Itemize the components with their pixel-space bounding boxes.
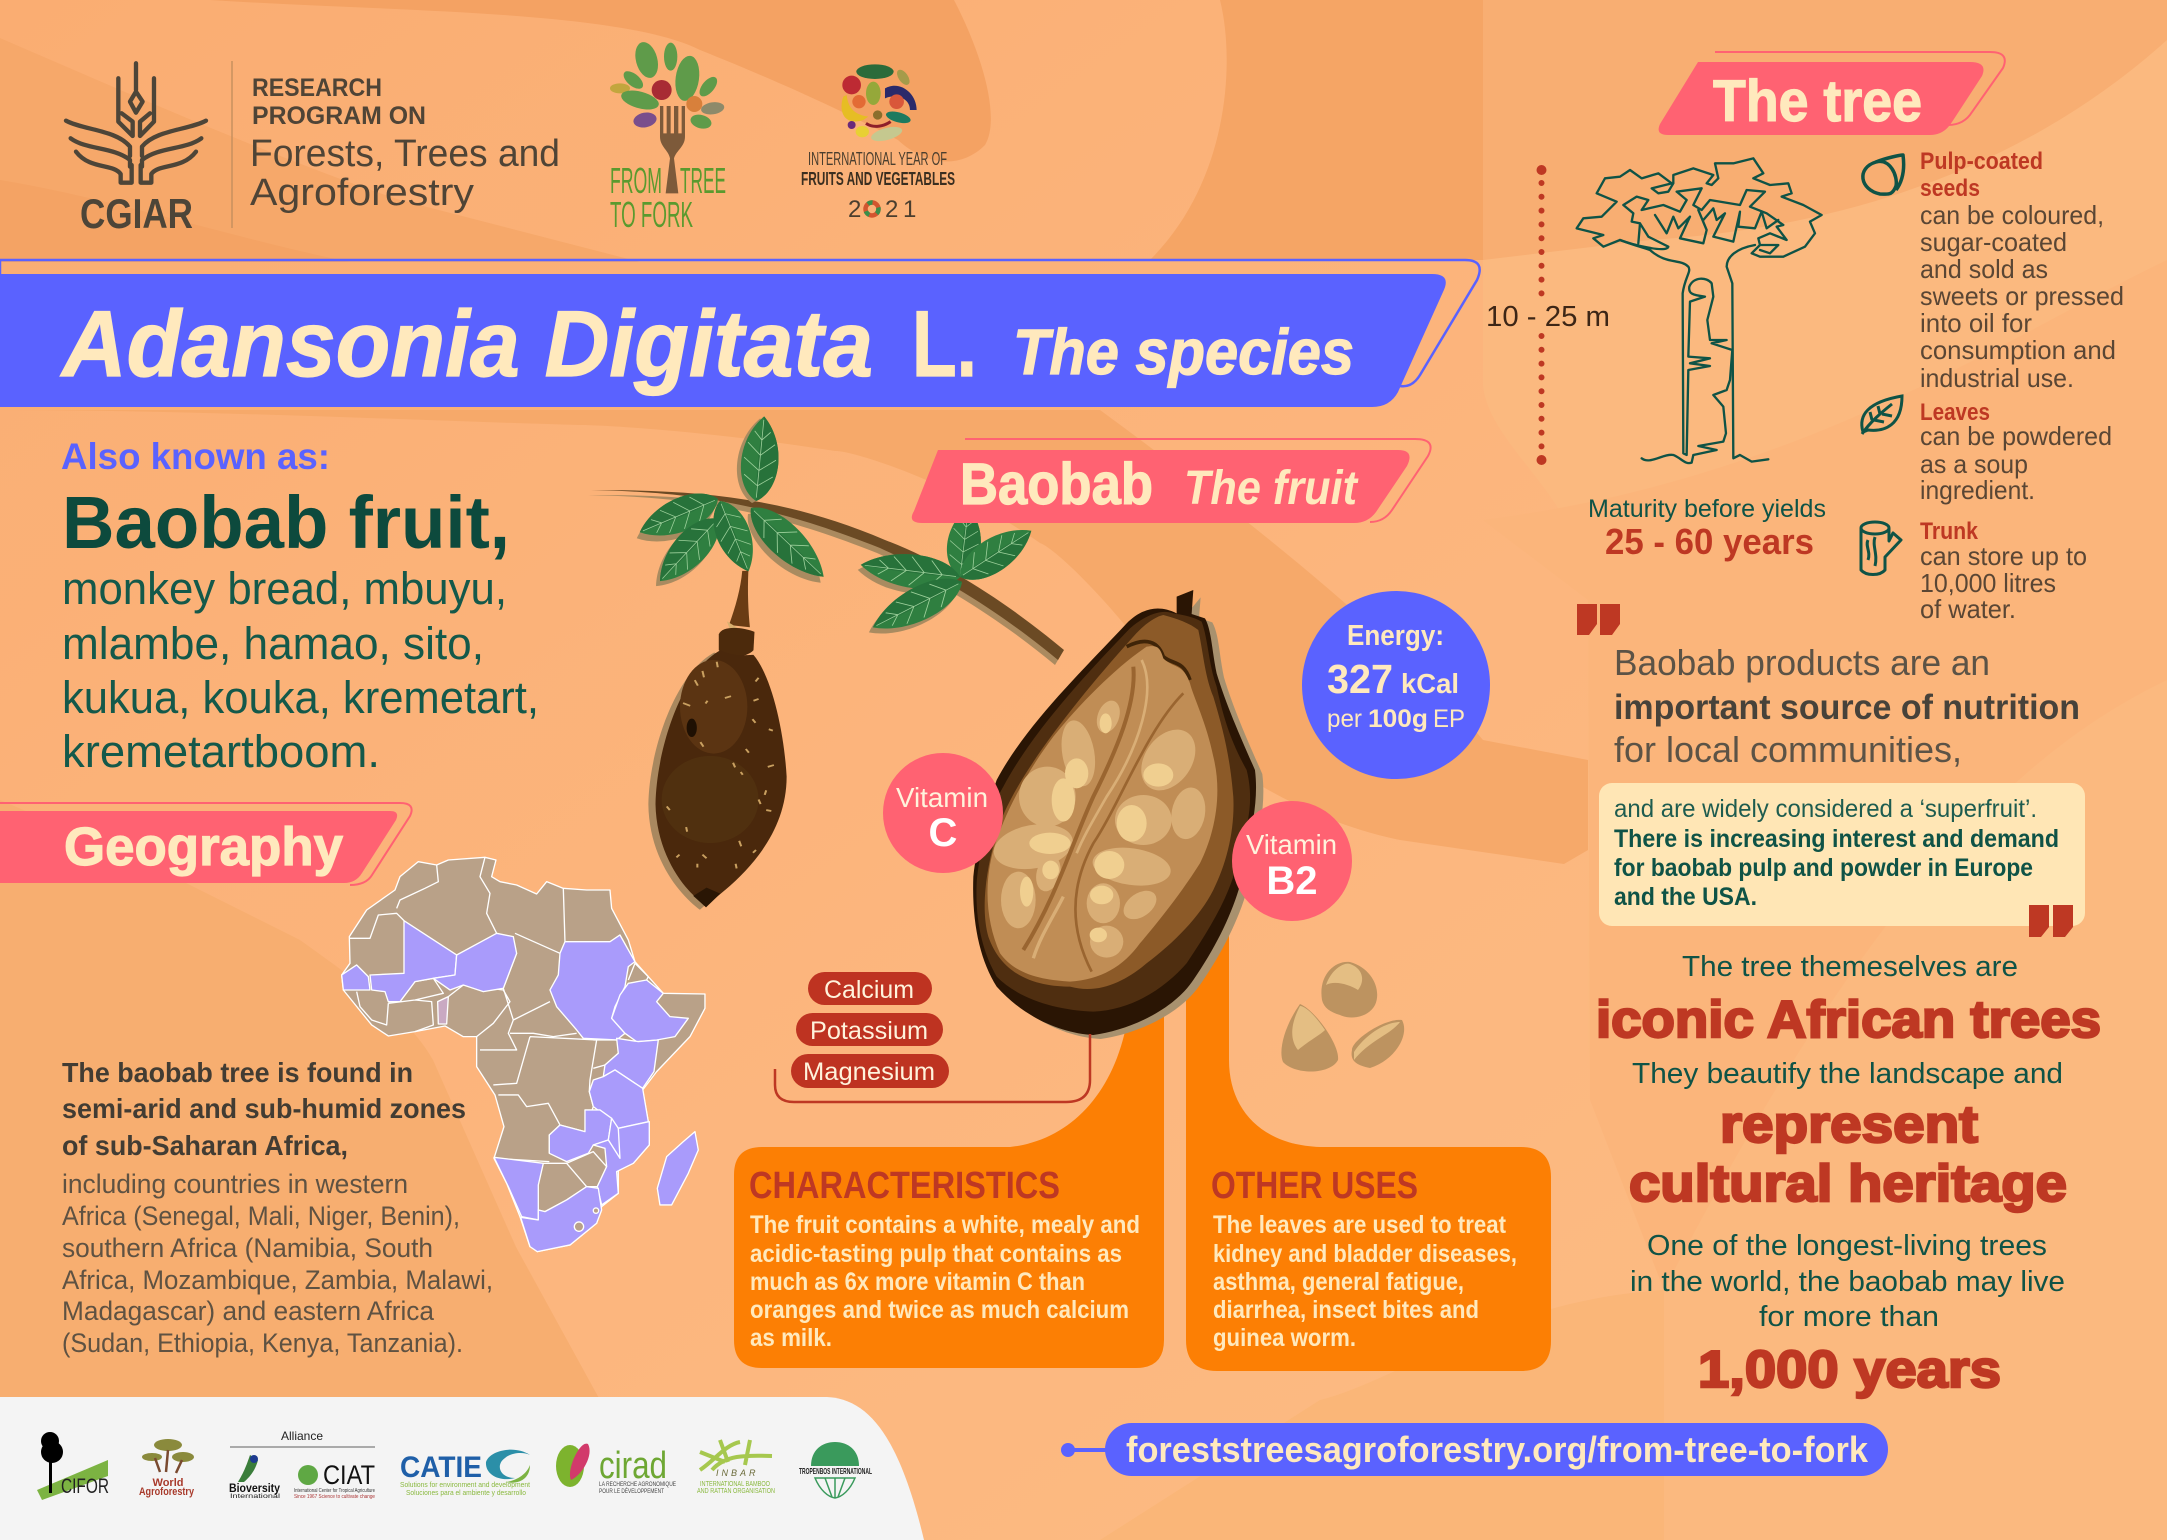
- text: other names: kukua, kouka, kremetart,: [62, 672, 539, 723]
- circle: vitamin B2: Vitamin: [1246, 829, 1337, 860]
- logo: Alliance Bioversity CIAT: International: [230, 1494, 280, 1500]
- tree uses list: [1861, 148, 2124, 624]
- callout: superfruit: [1599, 783, 2085, 926]
- logo: CATIE: Soluciones para el ambiente y desarrollo: [406, 1488, 526, 1497]
- text: bold intro: The baobab tree is found in: [62, 1057, 413, 1088]
- logo: CATIE: [400, 1450, 531, 1497]
- logo: Tropenbos International: [799, 1442, 872, 1498]
- logo: Tropenbos International: TROPENBOS INTERNATIONAL: [799, 1466, 872, 1476]
- text: countries list: Africa (Senegal, Mali, Niger, Benin),: [62, 1201, 460, 1231]
- logo: From Tree to Fork: [610, 40, 726, 235]
- text: iconic trees statement: cultural heritage: [1629, 1155, 2067, 1213]
- pill: magnesium: [791, 1054, 949, 1088]
- callout: superfruit: There is increasing interest and demand: [1614, 825, 2059, 853]
- heading: Baobab fruit: Baobab fruit,: [62, 481, 510, 564]
- text: trunk: 10,000 litres: [1920, 568, 2056, 598]
- orange box: characteristics: [734, 930, 1164, 1368]
- logo: World Agroforestry: World: [153, 1477, 183, 1489]
- icon: seeds: [1863, 155, 1904, 194]
- circle: vitamin C: Vitamin: [896, 782, 988, 813]
- logo: Alliance Bioversity CIAT: International Center for Tropical Agriculture: [294, 1488, 375, 1494]
- icon: fork tree: [610, 40, 725, 193]
- logo: From Tree to Fork: FROM: [610, 160, 662, 201]
- circle: energy: EP: [1433, 705, 1465, 733]
- text: maturity: Maturity before yields: [1588, 495, 1826, 523]
- text: pulp-coated seeds: sweets or pressed: [1920, 281, 2124, 311]
- logo: CIFOR: [37, 1432, 109, 1500]
- text: iconic trees statement: represent: [1720, 1096, 1978, 1154]
- callout: superfruit: for baobab pulp and powder in Europe: [1614, 854, 2033, 882]
- logo: CATIE: CATIE: [400, 1451, 482, 1484]
- text: trunk: of water.: [1920, 594, 2016, 624]
- logo: Alliance Bioversity CIAT: Alliance: [281, 1429, 323, 1443]
- text: iconic trees statement: The tree themeselves are: [1682, 951, 2018, 983]
- text: iconic trees statement: in the world, the baobab may live: [1630, 1266, 2065, 1298]
- logo: cirad: [556, 1444, 676, 1495]
- logo: cirad: POUR LE DÉVELOPPEMENT: [599, 1486, 664, 1495]
- text: countries list: Madagascar) and eastern Africa: [62, 1296, 435, 1326]
- text: quote lead: important source of nutrition: [1614, 688, 2080, 727]
- circle: energy: 327: [1327, 656, 1393, 702]
- height scale: 10 - 25 m: 10 - 25 m: [1486, 301, 1610, 333]
- title banner: [0, 260, 1480, 407]
- logo: cirad: LA RECHERCHE AGRONOMIQUE: [599, 1481, 676, 1488]
- text: program on: PROGRAM ON: [252, 102, 426, 130]
- pill: potassium: [796, 1013, 943, 1046]
- logo: Alliance Bioversity CIAT: CIAT: [323, 1460, 375, 1490]
- logo: World Agroforestry: Agroforestry: [139, 1486, 195, 1498]
- circle: vitamin C: C: [929, 811, 957, 855]
- text: bold intro: semi-arid and sub-humid zones: [62, 1093, 466, 1124]
- text: pulp-coated seeds: into oil for: [1920, 308, 2032, 338]
- text: pulp-coated seeds: sugar-coated: [1920, 227, 2067, 257]
- text: iconic trees statement: One of the longest-living trees: [1647, 1230, 2047, 1262]
- leaves: first cluster: [630, 415, 835, 598]
- text: other uses body: kidney and bladder diseases,: [1213, 1240, 1517, 1268]
- text: TREE: [680, 160, 726, 201]
- logo: INBAR: AND RATTAN ORGANISATION: [697, 1488, 775, 1495]
- text: pulp-coated seeds: and sold as: [1920, 254, 2048, 284]
- text: other uses body: diarrhea, insect bites and: [1213, 1296, 1479, 1324]
- text: 2021: 2: [848, 196, 861, 223]
- logo: Alliance Bioversity CIAT: [229, 1429, 375, 1500]
- icon: baobab tree outline: [1577, 158, 1822, 463]
- text: countries list: (Sudan, Ethiopia, Kenya, Tanzania).: [62, 1328, 463, 1358]
- text: other uses body: [1213, 1211, 1517, 1352]
- text: Agroforestry: Agroforestry: [250, 172, 474, 214]
- text: leaves: Leaves: [1920, 399, 1990, 426]
- logo: INBAR: [697, 1440, 775, 1495]
- heading: The tree: [1659, 52, 2005, 135]
- heading: The tree: The tree: [1713, 69, 1922, 134]
- text: characteristics body: much as 6x more vitamin C than: [750, 1268, 1085, 1296]
- text: quote lead: Baobab products are an: [1614, 642, 1990, 683]
- pill: calcium: Calcium: [824, 976, 914, 1004]
- heading: Baobab the fruit: The fruit: [1184, 462, 1359, 515]
- icon: trunk: [1861, 522, 1901, 574]
- text: other uses body: The leaves are used to treat: [1213, 1211, 1507, 1239]
- text: trunk: [1920, 518, 2087, 624]
- icon: fruit face: [842, 64, 917, 144]
- text: pulp-coated seeds: industrial use.: [1920, 363, 2074, 393]
- text: leaves: [1920, 399, 2112, 505]
- circle: energy: Energy:: [1347, 620, 1444, 652]
- text: characteristics body: acidic-tasting pulp that contains as: [750, 1240, 1122, 1268]
- title: L.: L.: [912, 291, 977, 396]
- subtitle: The species: The species: [1013, 316, 1354, 388]
- heading: Baobab the fruit: Baobab: [960, 452, 1153, 517]
- map of Africa: [342, 857, 705, 1252]
- text: characteristics body: [750, 1211, 1140, 1352]
- text: bold intro: of sub-Saharan Africa,: [62, 1130, 348, 1161]
- text: CGIAR: CGIAR: [80, 190, 193, 237]
- icon: opening quote mark: [1577, 604, 1620, 635]
- illustration: whole baobab fruit: [648, 571, 787, 910]
- text: countries list: [62, 1169, 493, 1358]
- text: trunk: Trunk: [1920, 518, 1979, 545]
- pill: calcium: [808, 972, 932, 1005]
- text: fruits and vegetables: FRUITS AND VEGETABLES: [801, 169, 955, 189]
- logo: INBAR: INBAR: [716, 1468, 759, 1478]
- text: other names: [62, 563, 539, 777]
- text: to fork: TO FORK: [610, 194, 693, 235]
- text: characteristics body: The fruit contains a white, mealy and: [750, 1211, 1140, 1239]
- text: countries list: southern Africa (Namibia, South: [62, 1233, 433, 1263]
- pill: magnesium: Magnesium: [803, 1058, 935, 1086]
- circle: energy: kCal: [1401, 668, 1459, 699]
- text: quote lead: [1614, 642, 2080, 770]
- logo: Alliance Bioversity CIAT: Bioversity: [229, 1481, 280, 1495]
- title: Adansonia Digitata: Adansonia Digitata: [60, 291, 873, 396]
- heading: Baobab the fruit: [912, 439, 1431, 523]
- circle: vitamin B2: B2: [1266, 859, 1318, 903]
- heading: also known as: Also known as:: [61, 436, 330, 477]
- icon: CGIAR wheat mark: [66, 63, 206, 183]
- text: pulp-coated seeds: [1920, 148, 2124, 393]
- logo: World Agroforestry: [139, 1439, 195, 1498]
- quote: [1577, 604, 2085, 937]
- text: other uses body: guinea worm.: [1213, 1324, 1356, 1352]
- text: other uses body: asthma, general fatigue,: [1213, 1268, 1464, 1296]
- circle: energy: per: [1327, 705, 1362, 733]
- footer partner logos: [0, 1397, 924, 1540]
- logo: cirad: cirad: [599, 1445, 667, 1487]
- countries highlighted: baobab range: [342, 921, 698, 1252]
- circle: energy: 100g: [1368, 705, 1428, 733]
- text: other names: monkey bread, mbuyu,: [62, 563, 507, 614]
- illustration: baobab seeds: [1281, 962, 1404, 1072]
- text: pulp-coated seeds: can be coloured,: [1920, 200, 2104, 230]
- text: bold intro: [62, 1057, 466, 1161]
- text: iconic trees statement: They beautify the landscape and: [1632, 1058, 2063, 1090]
- text: leaves: can be powdered: [1920, 421, 2112, 451]
- logo: CATIE: Solutions for environment and development: [400, 1480, 531, 1489]
- website link pill: foreststreesagroforestry.org/from-tree-to-fork: [1126, 1429, 1869, 1470]
- text: maturity: 25 - 60 years: [1605, 521, 1814, 562]
- circle: energy: [1302, 591, 1490, 779]
- text: research program: RESEARCH: [252, 74, 382, 102]
- text: iconic trees statement: for more than: [1759, 1301, 1939, 1333]
- pill: potassium: Potassium: [810, 1017, 928, 1045]
- text: pulp-coated seeds: consumption and: [1920, 335, 2116, 365]
- text: international year of: INTERNATIONAL YEAR OF: [808, 149, 947, 169]
- text: other names: kremetartboom.: [62, 726, 380, 777]
- text: countries list: Africa, Mozambique, Zambia, Malawi,: [62, 1265, 493, 1295]
- logo: INBAR: INTERNATIONAL BAMBOO: [700, 1481, 770, 1488]
- minerals list: [775, 972, 1090, 1102]
- illustration: cut baobab fruit: [973, 590, 1263, 1039]
- heading: other uses: OTHER USES: [1211, 1165, 1418, 1207]
- circle: vitamin B2: [1232, 801, 1352, 921]
- logo: International Year of Fruits and Vegetables: [801, 64, 955, 223]
- logo: Alliance Bioversity CIAT: Since 1967 Science to cultivate change: [294, 1494, 375, 1500]
- text: maturity: [1588, 495, 1826, 562]
- branch with leaves: [588, 415, 1064, 665]
- callout: superfruit: and the USA.: [1614, 883, 1757, 911]
- text: quote lead: for local communities,: [1614, 729, 1962, 770]
- logo: CGIAR: [66, 61, 382, 237]
- text: pulp-coated seeds: Pulp-coated: [1920, 148, 2043, 175]
- logo: CIFOR: CIFOR: [61, 1475, 109, 1498]
- leaves: second cluster: [856, 505, 1040, 647]
- text: characteristics body: as milk.: [750, 1324, 832, 1352]
- text: trunk: can store up to: [1920, 541, 2087, 571]
- logo: International Year of Fruits and Vegetables: 1: [903, 196, 916, 223]
- callout: superfruit: and are widely considered a ‘superfruit’.: [1614, 795, 2037, 823]
- icon: closing quote mark: [2029, 905, 2073, 937]
- circle: vitamin C: [883, 753, 1003, 873]
- icon: leaf: [1862, 396, 1902, 434]
- text: Forests, Trees and: Forests, Trees and: [250, 133, 560, 175]
- text: iconic trees statement: 1,000 years: [1698, 1341, 2001, 1399]
- text: leaves: as a soup: [1920, 449, 2028, 479]
- text: iconic trees statement: [1596, 951, 2101, 1399]
- text: leaves: ingredient.: [1920, 475, 2035, 505]
- text: characteristics body: oranges and twice as much calcium: [750, 1296, 1129, 1324]
- orange box: other uses: [1186, 930, 1551, 1371]
- heading: characteristics: CHARACTERISTICS: [749, 1165, 1060, 1207]
- height scale: 10 - 25 m: [1486, 165, 1610, 465]
- text: countries list: including countries in western: [62, 1169, 408, 1199]
- logo: International Year of Fruits and Vegetables: 2: [885, 196, 898, 223]
- text: other names: mlambe, hamao, sito,: [62, 618, 484, 669]
- text: geography description: [62, 1057, 493, 1358]
- heading: Geography: Geography: [64, 817, 343, 877]
- heading: Geography: [0, 803, 412, 885]
- text: iconic trees statement: iconic African trees: [1596, 991, 2101, 1049]
- text: pulp-coated seeds: seeds: [1920, 175, 1980, 202]
